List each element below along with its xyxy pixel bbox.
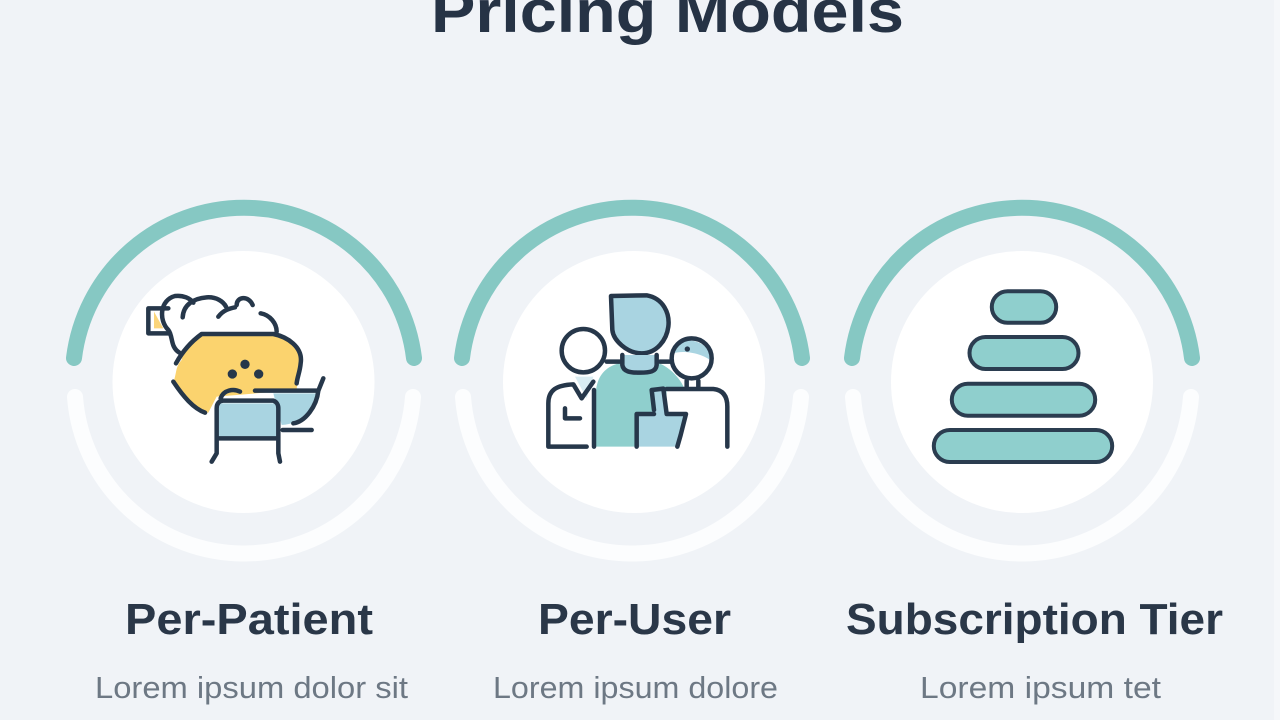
heading: Per-Patient xyxy=(125,595,373,644)
description xyxy=(493,670,778,720)
description: Lorem ipsum dolor sit xyxy=(95,670,408,705)
panel: per-patient xyxy=(74,208,414,720)
description: Lorem ipsum dolore xyxy=(493,670,778,705)
heading: Per-User xyxy=(538,595,731,644)
ring: teal upper arc xyxy=(852,208,1192,358)
description xyxy=(920,670,1161,720)
white icon disc xyxy=(112,251,374,513)
panel: per-user xyxy=(462,208,802,720)
ring: teal upper arc xyxy=(74,208,414,358)
dots xyxy=(228,360,263,379)
white icon disc xyxy=(503,251,765,513)
ring: white lower arc xyxy=(853,397,1191,553)
icon: group of users xyxy=(548,295,727,447)
icon: stacked tiers xyxy=(934,291,1112,462)
ring: white lower arc xyxy=(463,397,801,553)
ring: teal upper arc xyxy=(462,208,802,358)
description xyxy=(95,670,408,720)
ring: white lower arc xyxy=(75,397,413,553)
heading: Subscription Tier xyxy=(846,595,1223,644)
panel: subscription tier xyxy=(846,208,1223,720)
icon: patient care xyxy=(148,296,323,462)
description: Lorem ipsum tet xyxy=(920,670,1161,705)
white icon disc xyxy=(891,251,1153,513)
